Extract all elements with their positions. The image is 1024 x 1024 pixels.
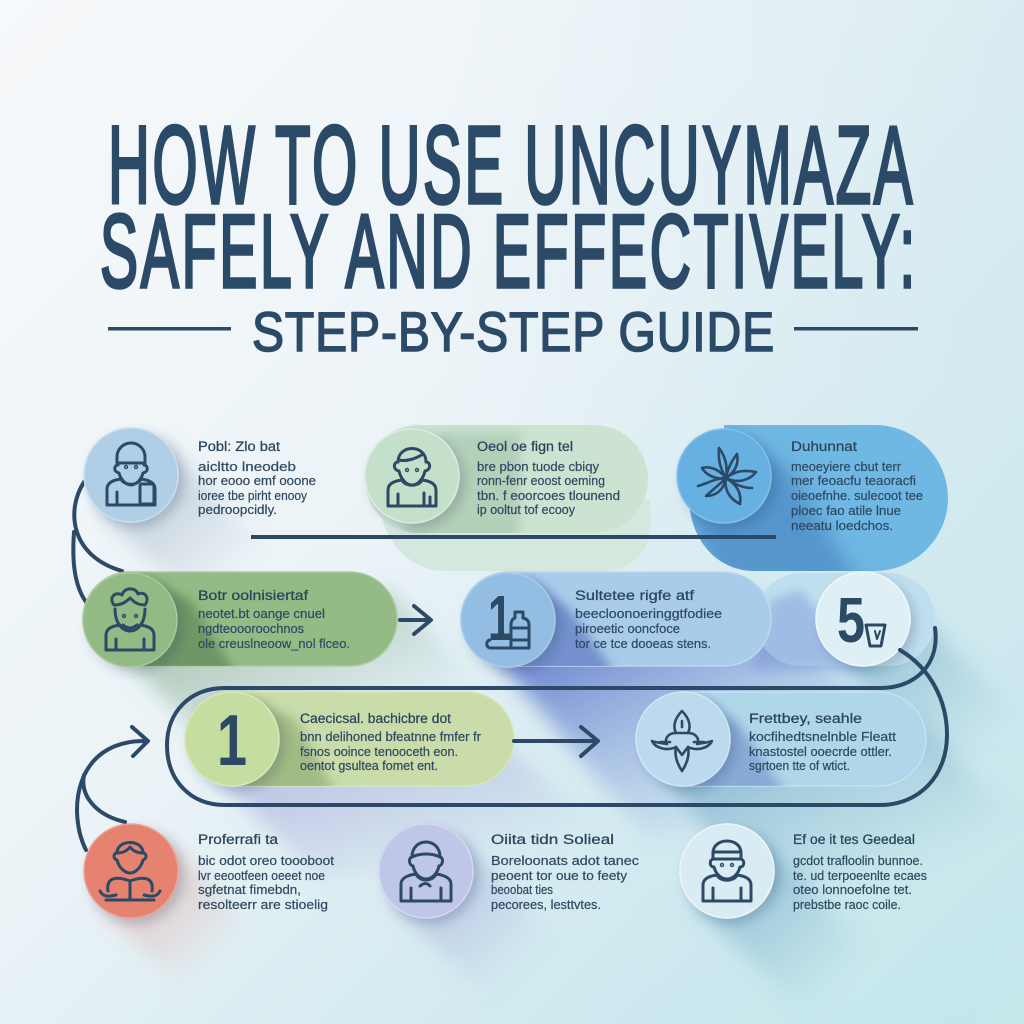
text block: Caecicsal. bachicbre dot [300, 711, 451, 726]
panel: step blue pill lower [636, 692, 926, 800]
text block: Proferrafi ta [198, 832, 279, 847]
text block: sgfetnat fimebdn, [198, 883, 301, 897]
text block: mer feoacfu teaoracfi [791, 474, 916, 488]
text block [198, 832, 335, 912]
circle icon: person with cap [379, 824, 473, 918]
text block: peoent tor oue to feety [491, 869, 628, 883]
text block: Boreloonats adot tanec [491, 854, 639, 868]
text block: oieoefnhe. sulecoot tee [791, 489, 923, 503]
text block: Duhunnat [791, 439, 857, 454]
circle icon: herb leaves [677, 429, 771, 523]
text block: ip ooltut tof ecooy [477, 503, 576, 517]
panel: bottom step purple [379, 824, 639, 918]
connector: looping track [167, 628, 947, 805]
panel: bottom step white [680, 824, 927, 918]
circle icon: person reading [84, 824, 178, 918]
text block: beoobat ties [491, 883, 553, 897]
text block: Sultetee rigfe atf [575, 588, 694, 603]
circle: number 1: 1 [217, 701, 247, 781]
title [100, 104, 918, 310]
text block: Frettbey, seahle [749, 711, 862, 726]
text block: pedroopcidly. [198, 503, 277, 517]
divider line [251, 535, 776, 539]
text block: ole creuslneoow_nol flceo. [198, 637, 350, 651]
text block [491, 832, 639, 912]
text block: resolteerr are stioelig [198, 898, 328, 912]
text block: prebstbe raoc coile. [793, 898, 901, 912]
text block: fsnos ooince tenooceth eon. [300, 745, 458, 759]
subtitle: STEP-BY-STEP GUIDE [252, 300, 775, 363]
text block: Oeol oe fign tel [477, 439, 573, 454]
text block [477, 439, 620, 517]
circle icon: ornament [636, 692, 730, 786]
circle icon: person with tablet [84, 428, 178, 522]
text block: sgrtoen tte of wtict. [749, 759, 850, 773]
text block: kocfihedtsnelnble Fleatt [749, 730, 897, 744]
text block: beecloonoeringgtfodiee [575, 607, 722, 621]
text block: oteo lonnoefolne tet. [793, 883, 912, 897]
panel: step 5 blue pill [461, 572, 771, 680]
circle icon: number 5 with glass: 5 [837, 584, 865, 656]
connector: bottom-left arrows [77, 727, 148, 850]
text block: oentot gsultea fomet ent. [300, 759, 438, 773]
panel: step 3 blue pill [677, 425, 948, 585]
text block [749, 711, 897, 773]
text block [300, 711, 481, 773]
circle icon: number 5 with glass [816, 572, 910, 666]
text block: ploec fao atile lnue [791, 504, 901, 518]
text block: tbn. f eoorcoes tlounend [477, 489, 620, 503]
text block: ronn-fenr eoost oeming [477, 474, 605, 488]
text block: neotet.bt oange cnuel [198, 607, 325, 621]
text block: lvr eeootfeen oeeet noe [198, 869, 325, 883]
text block: meoeyiere cbut terr [791, 460, 901, 474]
text block: bic odot oreo toooboot [198, 854, 335, 868]
text block: Oiita tidn Solieal [491, 832, 614, 847]
arrow: lime to blue [514, 727, 598, 756]
panel: step 6 light pill with 5 [750, 572, 935, 670]
text block: Botr oolnisiertaf [198, 588, 308, 603]
text block [575, 588, 722, 651]
text block: ngdteoooroochnos [198, 622, 304, 636]
text block [198, 588, 350, 651]
text block: Ef oe it tes Geedeal [793, 832, 915, 847]
long shadows [98, 443, 1024, 1024]
text block: tor ce tce dooeas stens. [575, 637, 711, 651]
text block: piroeetic ooncfoce [575, 622, 680, 636]
text block [793, 832, 927, 912]
text block: te. ud terpoeenlte ecaes [793, 869, 927, 883]
circle: number 1 [185, 692, 279, 786]
panel: step 1 top-left [84, 428, 316, 522]
circle icon: number 1 with bottle: 1 [488, 582, 512, 654]
panel: step 4 green pill [83, 572, 397, 680]
circle icon: number 1 with bottle [461, 573, 555, 667]
arrow: green to blue [400, 606, 431, 634]
text block: bnn delihoned bfeatnne fmfer fr [300, 730, 481, 744]
text block [198, 439, 316, 517]
text block [791, 439, 923, 533]
text block: Pobl: Zlo bat [198, 439, 280, 454]
text block: bre pbon tuode cbiqy [477, 460, 600, 474]
text block: hor eooo emf ooone [198, 474, 316, 488]
text block: neeatu loedchos. [791, 519, 893, 533]
panel: step 2 green pill [365, 425, 650, 571]
text block: ioree tbe pirht enooy [198, 489, 308, 503]
connector: top-left curves [73, 482, 122, 602]
circle icon: person with headset [365, 429, 459, 523]
text block: pecorees, lesttvtes. [491, 898, 601, 912]
text block: knastostel ooecrde ottler. [749, 745, 892, 759]
panel: step lime pill [185, 692, 514, 800]
circle icon: person with beanie [680, 824, 774, 918]
text block: gcdot trafloolin bunnoe. [793, 854, 923, 868]
circle icon: smiling child [83, 573, 177, 667]
text block: aicltto lneodeb [198, 460, 296, 474]
panel: bottom step red [84, 824, 335, 918]
